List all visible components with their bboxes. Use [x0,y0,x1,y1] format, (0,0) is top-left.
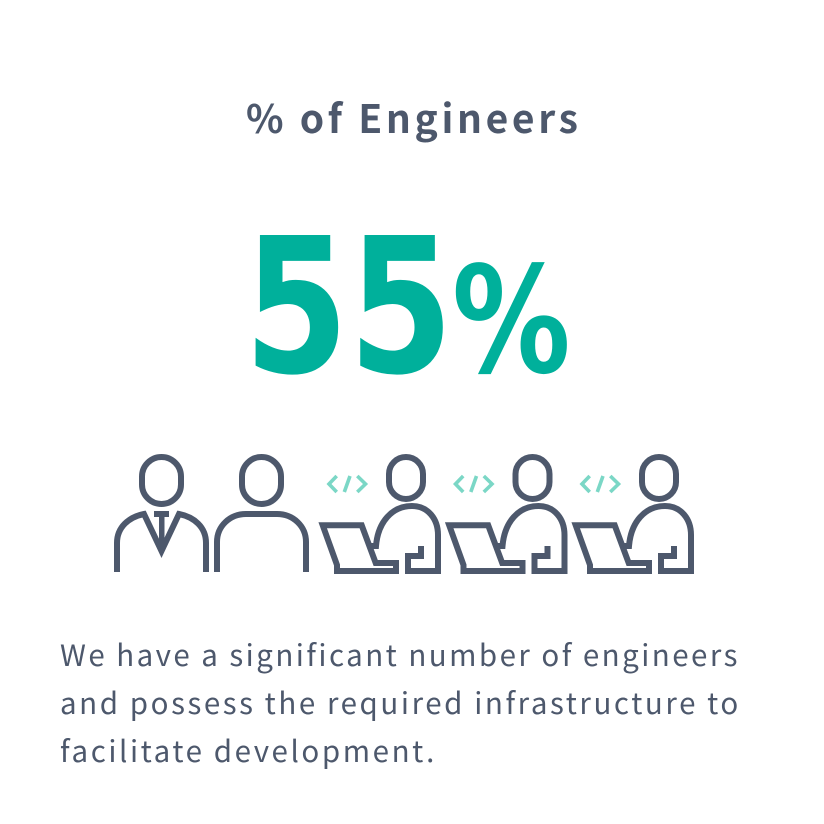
code symbol [329,476,366,492]
icon: engineer at laptop 2 [449,457,564,571]
title: % of Engineers [246,89,582,145]
big number: 55% [244,199,571,417]
digits 55: 55 [244,199,453,417]
icon: person [217,457,306,572]
icon: engineer at laptop 1 [323,457,438,571]
description text [60,633,741,771]
description text: facilitate development. [60,729,437,771]
icon: engineer at laptop 3 [576,457,691,571]
description text: and possess the required infrastructure to [60,681,741,723]
icon row: five people [117,457,691,572]
code symbol [582,476,618,492]
percent sign: % [452,235,571,407]
icon: manager with tie [117,457,206,572]
description text: We have a significant number of engineers [60,633,740,675]
code symbol [456,476,492,492]
